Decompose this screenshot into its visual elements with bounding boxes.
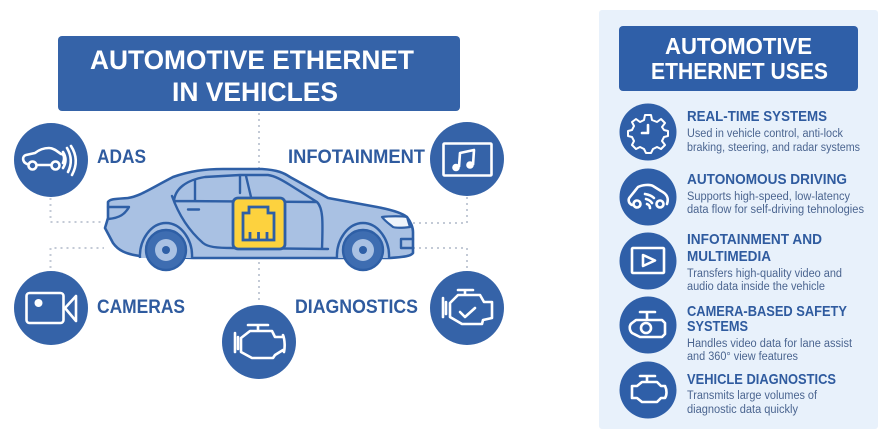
item: infotainment and multimedia: INFOTAINMENT AND <box>687 231 822 248</box>
icon: engine with check mark <box>430 271 504 345</box>
panel heading: ETHERNET USES <box>651 58 828 84</box>
icon: gear with clock <box>620 104 676 160</box>
icon: vehicle engine <box>620 362 676 418</box>
title: automotive ethernet in vehicles: AUTOMOTIVE ETHERNET <box>90 45 414 75</box>
item: autonomous driving: Supports high-speed, low-latency <box>687 191 850 203</box>
item: camera-based safety systems: SYSTEMS <box>687 318 748 335</box>
label: diagnostics: DIAGNOSTICS <box>295 297 418 318</box>
icon: safety camera <box>620 296 676 354</box>
icon: autonomous car <box>620 168 676 226</box>
icon: ADAS car with sensor waves <box>14 123 88 197</box>
title: automotive ethernet in vehicles <box>58 36 460 111</box>
panel: automotive ethernet uses <box>599 10 878 429</box>
item: real-time systems: braking, steering, and radar systems <box>687 142 860 154</box>
icon: video screen <box>620 232 676 290</box>
icon: infotainment screen with music note <box>430 122 504 196</box>
item: real-time systems <box>687 108 860 154</box>
item: vehicle diagnostics <box>687 371 836 416</box>
item: camera-based safety systems: Handles video data for lane assist <box>687 338 853 350</box>
item: real-time systems: Used in vehicle control, anti-lock <box>687 128 843 140</box>
item: infotainment and multimedia: Transfers high-quality video and <box>687 268 842 280</box>
icon: engine <box>222 305 296 379</box>
item: vehicle diagnostics: Transmits large volumes of <box>687 390 818 402</box>
item: infotainment and multimedia: MULTIMEDIA <box>687 248 771 265</box>
label: cameras: CAMERAS <box>97 297 185 318</box>
panel heading <box>619 26 858 91</box>
car illustration with ethernet port <box>105 169 413 270</box>
item: vehicle diagnostics: diagnostic data quickly <box>687 404 798 416</box>
item: camera-based safety systems <box>687 303 853 363</box>
item: real-time systems: REAL-TIME SYSTEMS <box>687 108 827 125</box>
title: automotive ethernet in vehicles: IN VEHICLES <box>172 77 338 107</box>
item: autonomous driving <box>687 171 864 216</box>
icon: camera <box>14 271 88 345</box>
item: camera-based safety systems: CAMERA-BASED SAFETY <box>687 303 847 320</box>
label: ADAS: ADAS <box>97 147 146 168</box>
item: autonomous driving: data flow for self-driving tehnologies <box>687 204 864 216</box>
item: autonomous driving: AUTONOMOUS DRIVING <box>687 171 847 188</box>
item: camera-based safety systems: and 360° view features <box>687 351 798 363</box>
item: vehicle diagnostics: VEHICLE DIAGNOSTICS <box>687 371 836 388</box>
label: infotainment: INFOTAINMENT <box>288 147 425 168</box>
item: infotainment and multimedia <box>687 231 842 293</box>
item: infotainment and multimedia: audio data inside the vehicle <box>687 281 825 293</box>
panel heading: AUTOMOTIVE <box>665 33 812 59</box>
